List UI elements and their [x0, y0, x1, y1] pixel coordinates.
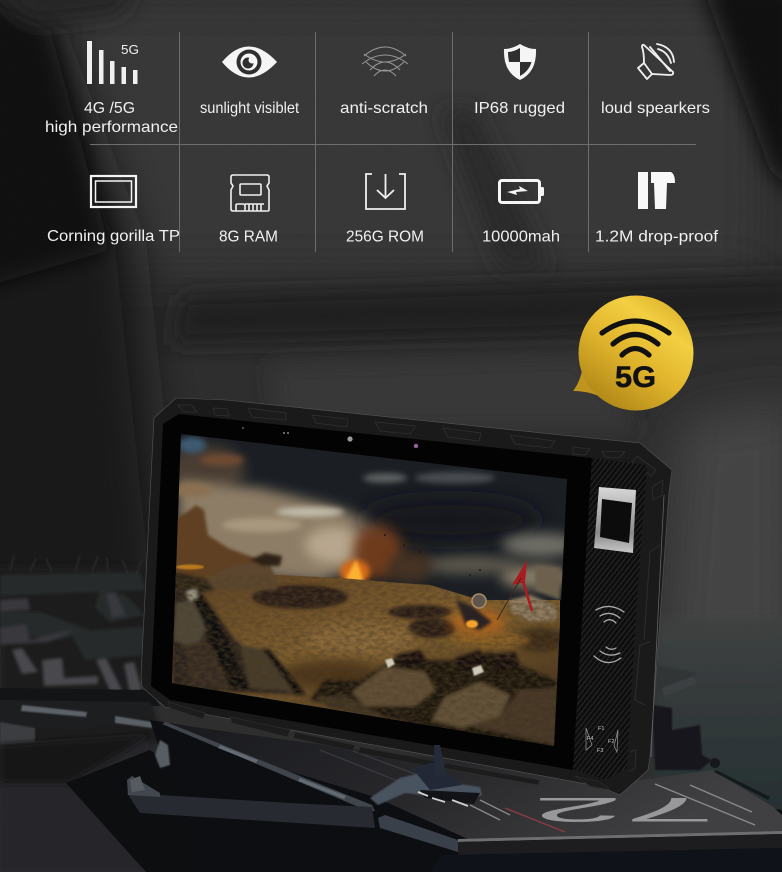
bottom edge segments — [168, 702, 610, 790]
function keys F1 to F4: F4 — [587, 736, 593, 742]
icon: glass panel — [91, 176, 136, 207]
icon: download to storage — [366, 174, 405, 209]
small jet model on deck — [370, 745, 482, 806]
wifi arcs — [602, 321, 669, 355]
background fleet: parked jets on left deck — [0, 556, 165, 745]
debris specks — [384, 532, 481, 586]
feature: sunlight visible — [200, 46, 300, 117]
top edge buttons — [178, 405, 663, 500]
right ruin — [535, 565, 560, 600]
front camera dots — [242, 427, 418, 448]
wreck and explosion — [450, 594, 506, 634]
right side ports — [628, 495, 664, 772]
label: sunlight visiblet: sunlight visiblet — [200, 100, 300, 117]
icon: eye — [222, 46, 277, 78]
ground shading — [252, 585, 565, 689]
icon: hammer — [638, 172, 675, 209]
carrier forward edge and front face — [378, 815, 782, 872]
tower silhouette right — [652, 665, 770, 800]
carbon fibre side panel — [573, 458, 647, 780]
pale stones — [385, 658, 484, 676]
label: 10000mah: 10000mah — [482, 228, 560, 246]
icon: battery — [500, 180, 544, 202]
red flag — [497, 560, 533, 620]
function keys F1 to F4: F3 — [597, 748, 603, 754]
feature: 1.2M drop-proof — [595, 172, 719, 246]
feature: 256G ROM — [346, 174, 424, 246]
foreground dark rocks left — [172, 588, 306, 695]
icon: speaker — [638, 44, 674, 79]
tablet outer rugged shell — [141, 398, 672, 795]
feature: 10000mah battery — [482, 180, 560, 246]
function keys F1 to F4: F2 — [608, 739, 614, 745]
grid dividers — [90, 32, 696, 252]
badge body — [578, 296, 694, 410]
ground — [172, 575, 560, 750]
fingerprint sensor — [594, 487, 636, 553]
feature: 4G/5G high performance — [45, 41, 178, 136]
carrier left side lift — [127, 722, 375, 828]
5G speech-bubble badge — [573, 296, 694, 410]
NFC arcs — [594, 606, 624, 663]
feature: Corning gorilla TP — [47, 176, 180, 245]
carrier top deck — [165, 723, 782, 840]
tablet — [141, 398, 672, 806]
label: 8G RAM: 8G RAM — [219, 228, 278, 246]
function keys F1 to F4 — [586, 726, 618, 754]
background: lower sea and hull — [0, 720, 782, 872]
icon: memory card — [231, 175, 269, 211]
label: anti-scratch: anti-scratch — [340, 100, 428, 117]
icon: shield — [504, 44, 536, 80]
rocks along horizon — [172, 553, 558, 622]
label: high performance: high performance — [45, 119, 178, 136]
deck number 72: 72 — [532, 791, 716, 829]
black front face — [151, 414, 592, 770]
label: 256G ROM: 256G ROM — [346, 228, 424, 246]
label: 4G /5G: 4G /5G — [84, 100, 135, 117]
sky — [165, 430, 575, 600]
distant cliff — [172, 505, 275, 580]
5G label: 5G — [615, 361, 656, 394]
icon: signal bars: 5G — [121, 43, 139, 57]
label: Corning gorilla TP: Corning gorilla TP — [47, 228, 180, 245]
foreground rocks right — [310, 650, 556, 750]
function keys F1 to F4: F1 — [598, 726, 604, 732]
feature: loud speakers — [601, 44, 710, 117]
label: loud spearkers: loud spearkers — [601, 100, 710, 117]
fire — [340, 560, 370, 584]
explosion smoke column — [353, 526, 403, 578]
label: 1.2M drop-proof: 1.2M drop-proof — [595, 228, 719, 246]
feature: IP68 rugged — [474, 44, 565, 117]
icon: scratch mesh — [362, 47, 408, 76]
label: IP68 rugged: IP68 rugged — [474, 100, 565, 117]
feature: 8G RAM — [219, 175, 278, 246]
aircraft carrier model — [127, 665, 782, 872]
screen: battlefield artwork — [165, 430, 578, 760]
badge tail — [573, 335, 606, 400]
deck runway markings — [320, 748, 755, 832]
clouds — [165, 437, 578, 589]
ground texture — [173, 575, 560, 746]
feature: anti-scratch — [340, 47, 428, 117]
